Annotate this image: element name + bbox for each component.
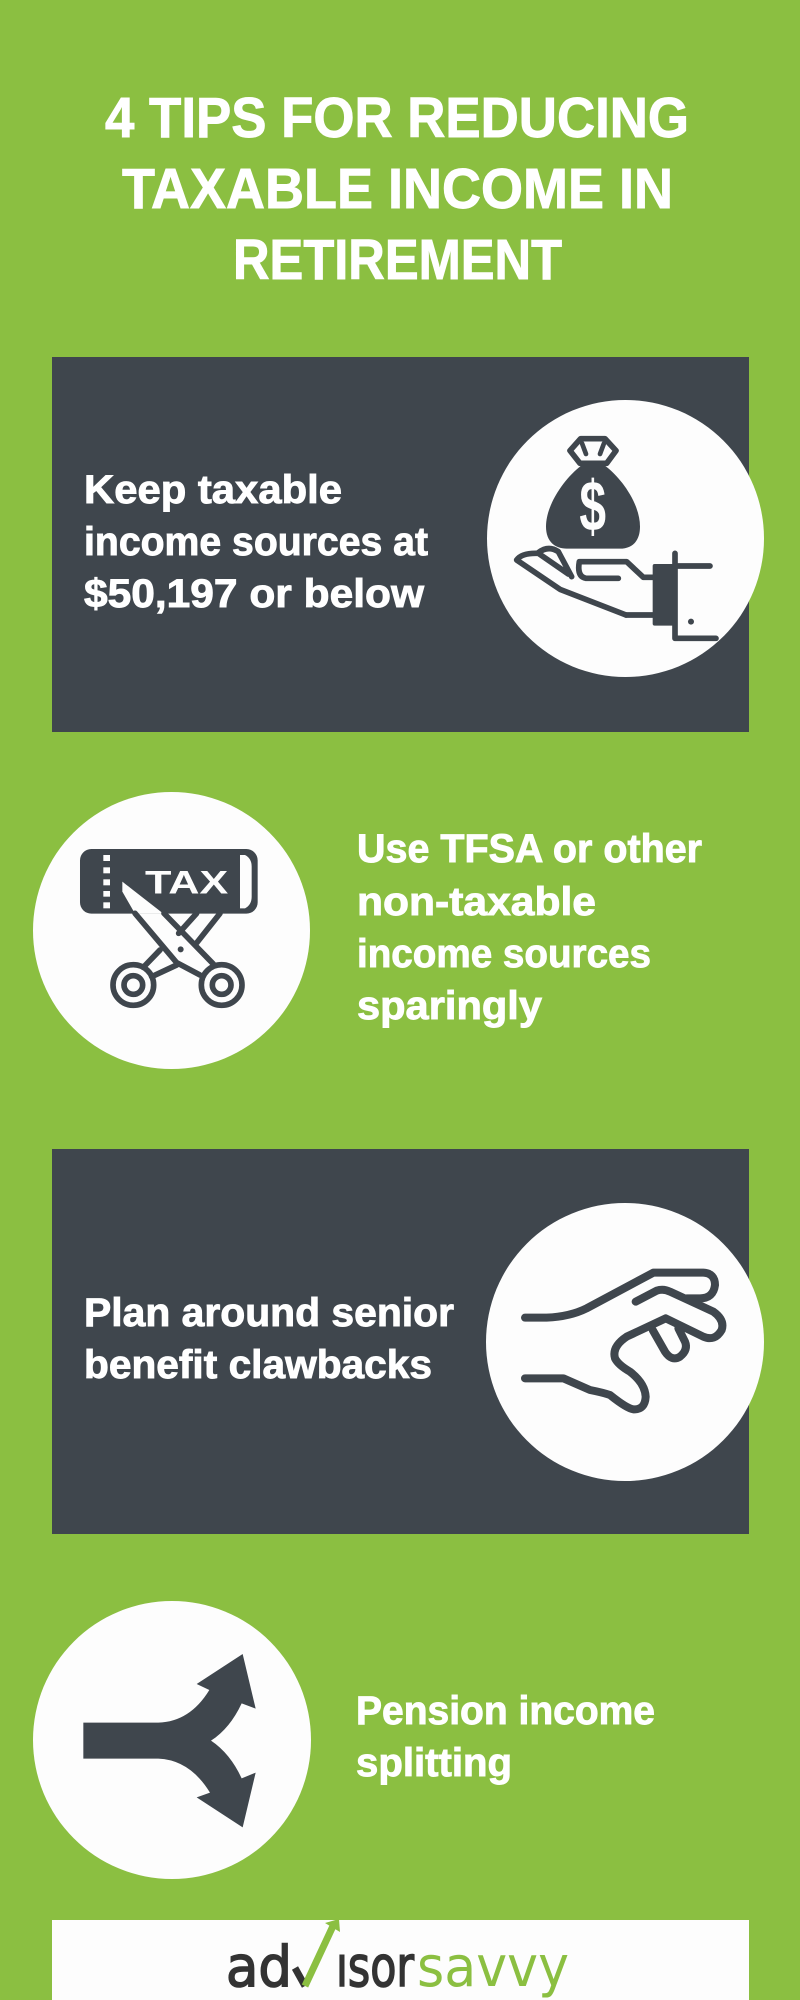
title: RETIREMENT xyxy=(233,228,562,292)
tip 3 text xyxy=(84,1291,454,1387)
icon: scissors cutting tax ticket: TAX xyxy=(145,864,229,900)
panel: tip 1 xyxy=(52,357,749,732)
tip 2 text: income sources xyxy=(357,932,651,976)
tip 1 text: $50,197 or below xyxy=(84,572,425,616)
tip 4 text xyxy=(356,1689,655,1785)
tip 2 text: non-taxable xyxy=(357,880,596,924)
tip 3 text: Plan around senior xyxy=(84,1291,454,1335)
logo: advisorsavvy: ısor xyxy=(336,1935,415,2000)
logo: advisorsavvy xyxy=(52,1919,749,2000)
tip 1 text xyxy=(84,468,428,616)
tip 4 text: splitting xyxy=(356,1741,512,1785)
title: 4 TIPS FOR REDUCING xyxy=(105,86,689,150)
tip 3 text: benefit clawbacks xyxy=(84,1343,432,1387)
title: TAXABLE INCOME IN xyxy=(122,157,673,221)
icon: money bag on hand: $ xyxy=(579,466,606,546)
icon: splitting arrow xyxy=(33,1601,311,1879)
tip 2 text: sparingly xyxy=(357,984,543,1028)
icon: scissors cutting tax ticket xyxy=(33,792,310,1069)
logo: advisorsavvy: savvy xyxy=(417,1935,569,2000)
tip 1 text: Keep taxable xyxy=(84,468,342,512)
title xyxy=(105,86,689,292)
icon: reaching hand xyxy=(486,1203,764,1481)
tip 2 text xyxy=(357,827,702,1028)
tip 2 text: Use TFSA or other xyxy=(357,827,702,871)
tip 4 text: Pension income xyxy=(356,1689,655,1733)
logo: advisorsavvy: ad xyxy=(226,1935,292,2000)
tip 1 text: income sources at xyxy=(84,520,428,564)
panel: tip 3 xyxy=(52,1149,749,1534)
icon: money bag on hand xyxy=(487,400,764,677)
